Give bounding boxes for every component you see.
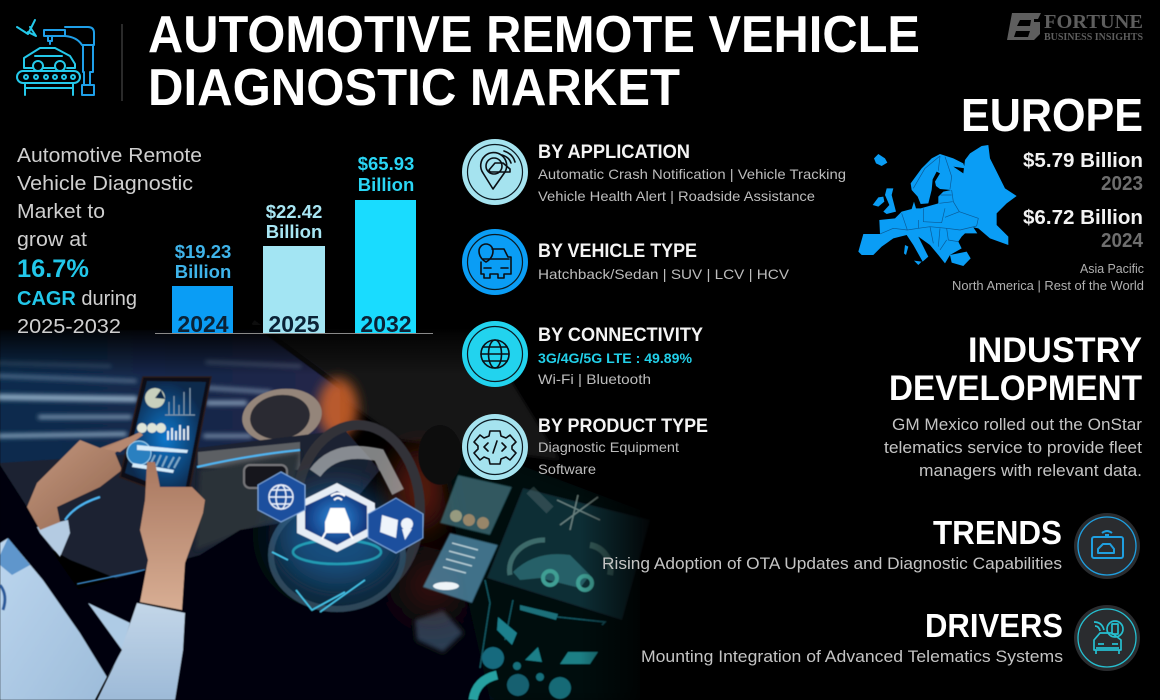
drivers xyxy=(641,605,1140,671)
icon: location pin with car xyxy=(481,151,515,189)
bar 2024: 2024 xyxy=(177,311,229,337)
icon: truck pin on hexagon xyxy=(380,515,413,540)
title: AUTOMOTIVE REMOTE VEHICLE xyxy=(148,6,920,64)
other regions: Asia Pacific xyxy=(1080,262,1144,276)
trends xyxy=(602,513,1140,579)
heading: Europe: EUROPE xyxy=(961,89,1143,141)
CAGR text block xyxy=(17,144,202,338)
window sky xyxy=(0,330,340,465)
shirt body and sleeve xyxy=(0,538,107,700)
bar 2032: $65.93 xyxy=(358,153,414,174)
icon: globe on hexagon xyxy=(269,485,293,509)
segment: by product type: Diagnostic Equipment xyxy=(538,439,679,455)
title: DIAGNOSTIC MARKET xyxy=(148,59,680,117)
dark roof band and pillar xyxy=(262,330,560,460)
bar 2024: Billion xyxy=(175,261,231,282)
icon: car with shield xyxy=(479,244,511,278)
CAGR text block: 2025-2032 xyxy=(17,315,121,338)
CAGR text block: CAGR during xyxy=(17,287,137,310)
tablet xyxy=(120,377,211,502)
fade overlays xyxy=(0,325,720,375)
bar chart: market size xyxy=(155,153,433,337)
Europe market figures: $5.79 Billion xyxy=(1023,150,1143,172)
main infotainment screen xyxy=(487,488,650,620)
icon: connected car on screen xyxy=(1092,531,1123,558)
bar 2032: 2032 xyxy=(360,311,412,337)
orange glow on A-pillar xyxy=(318,378,358,438)
icon: automated car assembly line xyxy=(17,20,94,95)
industry development text: GM Mexico rolled out the OnStar xyxy=(892,416,1143,434)
segment: by vehicle type: Hatchback/Sedan | SUV | LCV | HCV xyxy=(538,266,790,282)
door handle xyxy=(244,465,287,488)
segment: by connectivity: 3G/4G/5G LTE : 49.89% xyxy=(538,351,692,366)
centre dashboard xyxy=(440,445,640,700)
console controls xyxy=(473,580,605,700)
wrist cuff xyxy=(37,520,70,557)
forearm and lower hand xyxy=(140,462,205,610)
bar 2025 xyxy=(263,201,325,337)
segment: by connectivity xyxy=(462,321,703,387)
bar 2025: 2025 xyxy=(268,311,320,337)
segment: by product type: Software xyxy=(538,461,596,477)
heading: industry development: DEVELOPMENT xyxy=(889,369,1142,408)
segment: by product type: BY PRODUCT TYPE xyxy=(538,415,708,437)
Europe market figures: 2024 xyxy=(1101,230,1144,252)
seatbelt xyxy=(0,465,122,677)
icon: car with telematics xyxy=(1094,621,1123,654)
CAGR text block: 16.7% xyxy=(17,255,89,283)
Europe market figures: $6.72 Billion xyxy=(1023,207,1143,229)
drivers: Mounting Integration of Advanced Telematics Systems xyxy=(641,648,1063,666)
hands xyxy=(27,432,142,530)
bar 2025: Billion xyxy=(266,221,322,242)
bar 2024 xyxy=(172,241,233,337)
door panel xyxy=(0,430,380,600)
logo: Fortune Business Insights: FORTUNE xyxy=(1044,11,1143,33)
CAGR text block: grow at xyxy=(17,228,87,251)
CAGR text block: Vehicle Diagnostic xyxy=(17,172,193,195)
segment: by connectivity: BY CONNECTIVITY xyxy=(538,324,703,346)
bar 2025: $22.42 xyxy=(266,201,322,222)
Europe market figures xyxy=(1023,150,1144,252)
light streaks behind the tablet xyxy=(0,362,300,436)
index finger xyxy=(104,432,143,452)
segment: by application: Vehicle Health Alert | Roadside Assistance xyxy=(538,188,815,204)
segment: by application: BY APPLICATION xyxy=(538,141,690,163)
segment: by application: Automatic Crash Notification | Vehicle Tracking xyxy=(538,166,846,182)
photo: driver using tablet in connected car xyxy=(0,322,740,700)
industry development text: managers with relevant data. xyxy=(919,462,1142,480)
segment: by product type xyxy=(462,414,708,480)
CAGR text block: Market to xyxy=(17,200,105,223)
map: Europe xyxy=(858,145,1017,266)
knee highlight xyxy=(415,610,463,652)
floating screen panels xyxy=(440,475,512,535)
segment: by vehicle type xyxy=(462,229,790,295)
segment: by connectivity: Wi-Fi | Bluetooth xyxy=(538,371,651,387)
CAGR text block: Automotive Remote xyxy=(17,144,202,167)
red interior glow xyxy=(402,557,462,613)
icon: gear with code xyxy=(474,431,516,464)
segment: by vehicle type: BY VEHICLE TYPE xyxy=(538,240,697,262)
industry development text xyxy=(884,416,1143,480)
title xyxy=(148,6,920,117)
heading: industry development xyxy=(889,331,1142,408)
logo: Fortune Business Insights: BUSINESS INSIGHTS xyxy=(1044,32,1143,43)
logo: Fortune Business Insights xyxy=(1007,11,1143,43)
heading: industry development: INDUSTRY xyxy=(968,331,1142,370)
side mirror xyxy=(239,384,325,448)
trends: Rising Adoption of OTA Updates and Diagnostic Capabilities xyxy=(602,555,1062,573)
icon: car on hexagon xyxy=(322,494,353,539)
other regions xyxy=(952,262,1144,293)
trends: TRENDS xyxy=(933,514,1062,551)
other regions: North America | Rest of the World xyxy=(952,279,1144,293)
Europe market figures: 2023 xyxy=(1101,173,1143,195)
segment: by application xyxy=(462,139,846,205)
icon: globe xyxy=(481,340,509,368)
drivers: DRIVERS xyxy=(925,607,1063,644)
industry development text: telematics service to provide fleet xyxy=(884,439,1142,457)
bar 2024: $19.23 xyxy=(175,241,231,262)
steering wheel hologram xyxy=(258,425,423,612)
seat and legs darkness xyxy=(75,520,520,700)
bar 2032 xyxy=(355,153,416,337)
bar 2032: Billion xyxy=(358,174,414,195)
ambient blue door light xyxy=(65,450,300,520)
